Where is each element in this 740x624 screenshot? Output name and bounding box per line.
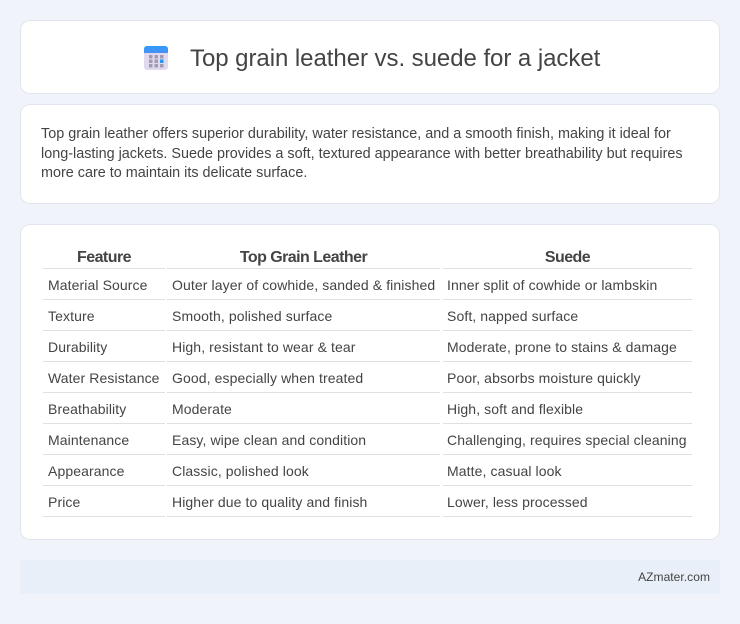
row: breathability — [48, 401, 583, 417]
row: material source — [48, 277, 657, 293]
row: material source: Inner split of cowhide or lambskin — [447, 277, 657, 293]
footer bar — [20, 560, 720, 594]
title: Top grain leather vs. suede for a jacket — [190, 45, 600, 72]
row: durability: Durability — [48, 339, 107, 355]
row: price: Higher due to quality and finish — [172, 494, 367, 510]
row: appearance — [48, 463, 562, 479]
row: durability: Moderate, prone to stains & damage — [447, 339, 677, 355]
row: water resistance — [48, 370, 641, 386]
table header: Feature — [77, 249, 131, 266]
row: maintenance — [48, 432, 687, 448]
row: water resistance: Good, especially when treated — [172, 370, 363, 386]
row: maintenance: Challenging, requires special cleaning — [447, 432, 687, 448]
table header — [77, 249, 590, 266]
summary text: long-lasting jackets. Suede provides a soft, textured appearance with better breathability but requires — [41, 146, 683, 162]
row: breathability: High, soft and flexible — [447, 401, 583, 417]
row: appearance: Appearance — [48, 463, 125, 479]
table header: Top Grain Leather — [240, 249, 367, 266]
footer credit: AZmater.com — [638, 570, 710, 584]
panel: title card — [20, 20, 720, 94]
summary text: Top grain leather offers superior durability, water resistance, and a smooth finish, making it ideal for — [41, 126, 671, 142]
row: maintenance: Maintenance — [48, 432, 129, 448]
summary text: more care to maintain its delicate surface. — [41, 165, 307, 181]
icon: calendar — [144, 46, 168, 70]
row: breathability: Moderate — [172, 401, 232, 417]
summary text — [41, 126, 683, 181]
row: material source: Material Source — [48, 277, 148, 293]
row: appearance: Matte, casual look — [447, 463, 562, 479]
row: durability: High, resistant to wear & tear — [172, 339, 356, 355]
row: texture: Soft, napped surface — [447, 308, 578, 324]
row: price — [48, 494, 588, 510]
row: texture: Smooth, polished surface — [172, 308, 332, 324]
row: water resistance: Poor, absorbs moisture quickly — [447, 370, 641, 386]
row: material source: Outer layer of cowhide, sanded & finished — [172, 277, 435, 293]
row: price: Lower, less processed — [447, 494, 588, 510]
row: appearance: Classic, polished look — [172, 463, 309, 479]
row: price: Price — [48, 494, 80, 510]
panel: summary — [20, 104, 720, 204]
row: texture: Texture — [48, 308, 95, 324]
row: maintenance: Easy, wipe clean and condition — [172, 432, 366, 448]
table header: Suede — [545, 249, 590, 266]
panel: comparison table — [20, 224, 720, 540]
row: breathability: Breathability — [48, 401, 126, 417]
row: durability — [48, 339, 677, 355]
row: water resistance: Water Resistance — [48, 370, 160, 386]
row: texture — [48, 308, 578, 324]
